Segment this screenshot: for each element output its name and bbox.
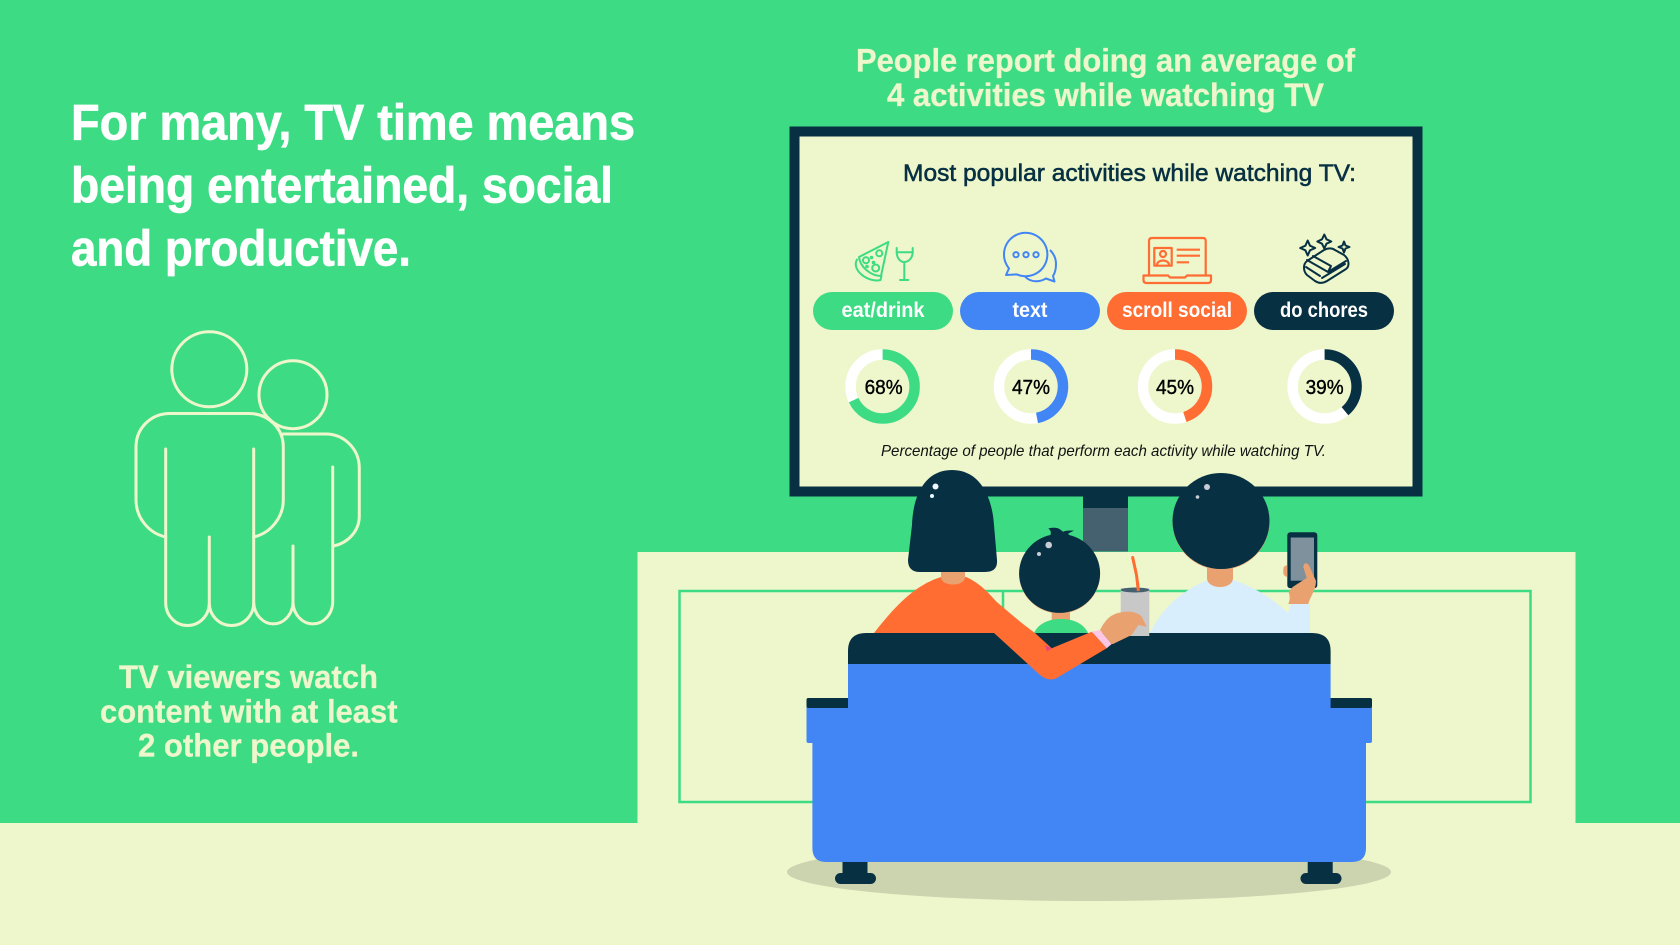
pill: do chores [1254,292,1394,330]
man [1150,473,1310,633]
icon: two people outline [136,332,359,626]
icon: laptop with profile [1144,238,1211,283]
icon: folded laundry and sparkles [1300,234,1350,283]
donut chart: 39% [1293,354,1357,418]
icon: pizza and wine glass [856,242,913,280]
cup with straw [1121,558,1149,636]
heading: average activities [856,42,1355,113]
donut chart: 45% [1143,354,1207,418]
pill: text: text [1012,299,1048,322]
sofa feet [835,862,1342,884]
main heading: and productive. [71,220,411,276]
icon: phone in hand [1283,532,1317,604]
chart footnote: Percentage of people that perform each activity while watching TV. [881,443,1326,460]
pill: do chores: do chores [1280,299,1368,322]
main heading: being entertained, social [71,158,613,214]
caption: viewers watch with others: TV viewers watch [119,659,378,695]
back wall unit [638,552,1576,824]
pill: scroll social: scroll social [1122,299,1232,322]
tv stand [1083,496,1128,552]
woman's arm around the sofa [966,577,1147,679]
boy [1019,528,1100,633]
main heading [71,94,635,276]
pill: scroll social [1107,292,1247,330]
pill: eat/drink [813,292,953,330]
sofa [806,633,1372,884]
screen heading: Most popular activities while watching TV: [903,160,1356,187]
donut chart: 45%: 45% [1156,377,1194,399]
pill: eat/drink: eat/drink [842,299,925,322]
heading: average activities: 4 activities while watching TV [887,77,1325,113]
caption: viewers watch with others [100,659,398,764]
donut chart: 39%: 39% [1306,377,1344,399]
donut chart: 47% [999,354,1063,418]
woman [874,470,1020,633]
caption: viewers watch with others: 2 other people. [138,728,359,764]
donut chart: 47%: 47% [1012,377,1050,399]
caption: viewers watch with others: content with at least [100,694,398,730]
main heading: For many, TV time means [71,94,635,150]
donut chart: 68%: 68% [865,377,903,399]
floor [0,823,1680,945]
pill: text [960,292,1100,330]
sofa shadow [787,843,1391,901]
tv screen [794,132,1418,492]
heading: average activities: People report doing an average of [856,42,1355,78]
donut chart: 68% [851,354,915,418]
icon: chat bubbles [1004,233,1056,282]
